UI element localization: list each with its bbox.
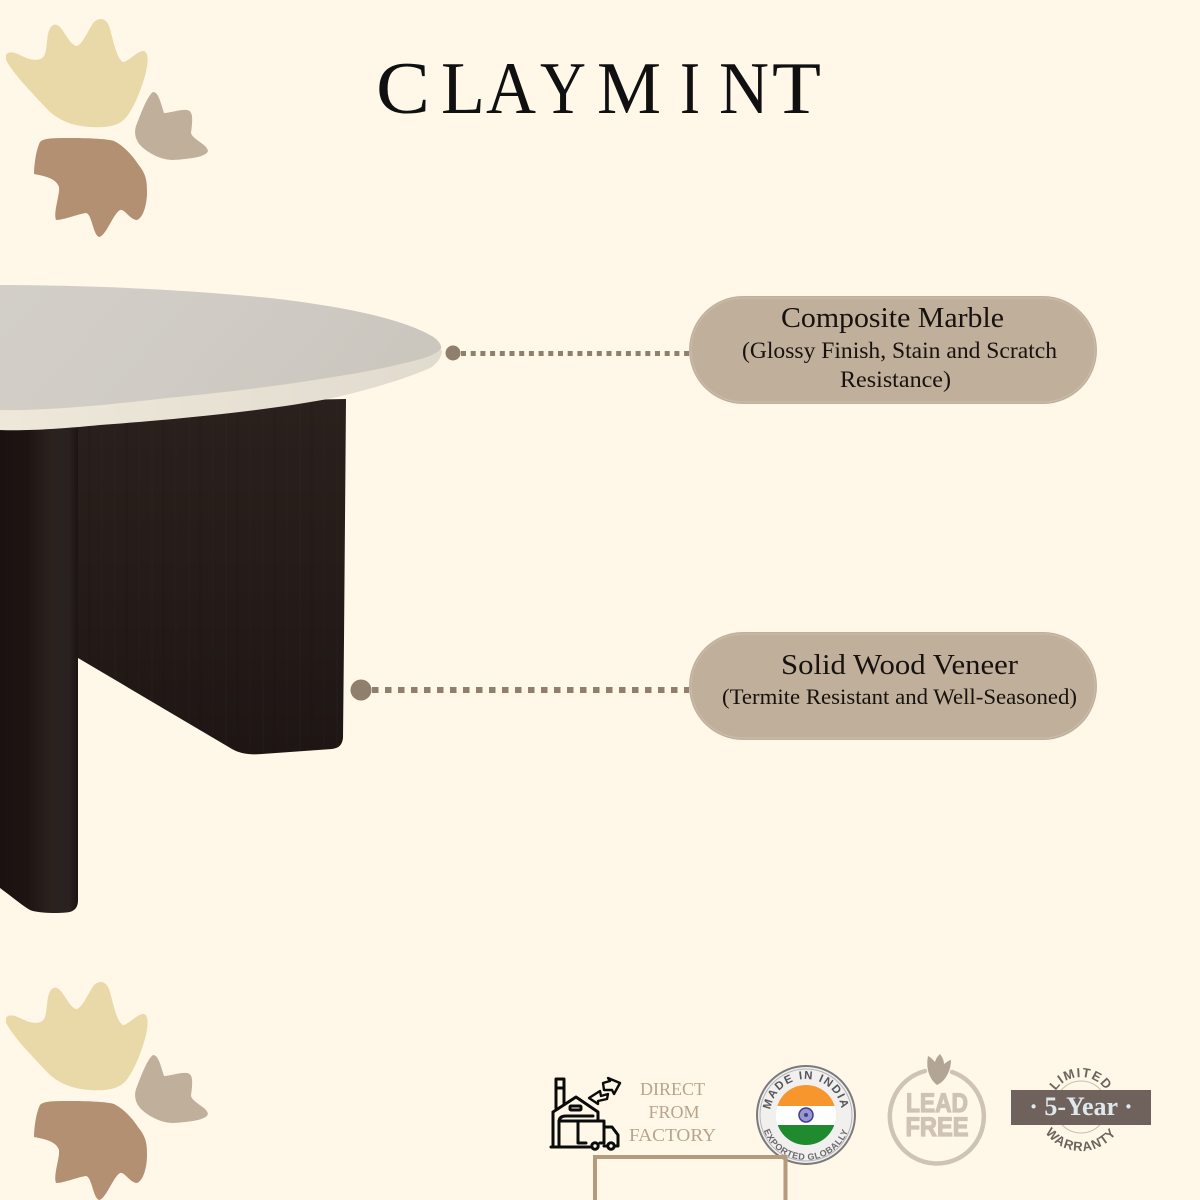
brand logo: CLAYMINT: C — [376, 48, 430, 130]
brand logo: CLAYMINT: Y — [540, 48, 586, 130]
brand logo: CLAYMINT: N — [719, 48, 769, 130]
brand logo: CLAYMINT: M — [597, 48, 661, 130]
decorative leaf cluster: top left — [6, 19, 208, 237]
icon: factory and truck — [551, 1078, 620, 1149]
badge: made in india: MADE IN INDIA — [762, 1070, 848, 1109]
direct from factory label: DIRECT — [640, 1079, 705, 1099]
badge: 5-year limited warranty — [1011, 1068, 1151, 1152]
brand logo: CLAYMINT: I — [680, 48, 700, 130]
direct from factory label — [629, 1079, 716, 1145]
panel wood grain — [79, 399, 345, 754]
badge: 5-year limited warranty: · 5-Year · — [1029, 1092, 1133, 1121]
badge: made in india — [756, 1065, 856, 1165]
callout connector: wood — [350, 680, 689, 700]
badge: 5-year limited warranty: WARRANTY — [1046, 1126, 1114, 1152]
badge: 5-year limited warranty: LIMITED — [1049, 1068, 1110, 1090]
badge: lead free: FREE — [906, 1112, 968, 1142]
callout pill: solid wood veneer: (Termite Resistant and Well-Seasoned) — [722, 684, 1077, 709]
callout pill: composite marble: Resistance) — [840, 367, 951, 392]
badge: lead free: LEAD — [906, 1088, 968, 1118]
callout pill: solid wood veneer — [689, 632, 1097, 740]
marble top — [0, 285, 441, 410]
brand logo: CLAYMINT: L — [441, 48, 485, 130]
callout pill: solid wood veneer: Solid Wood Veneer — [781, 650, 1019, 681]
callout pill: composite marble — [689, 296, 1097, 404]
table panel leg — [60, 399, 346, 754]
table front leg — [0, 425, 78, 913]
decorative leaf cluster: bottom left — [6, 982, 208, 1200]
callout pill: composite marble: Composite Marble — [781, 303, 1004, 334]
direct from factory label: FROM — [648, 1102, 700, 1122]
product photo: round table — [0, 285, 442, 913]
callout connector: marble — [446, 346, 689, 360]
brand logo: CLAYMINT — [376, 48, 821, 130]
direct from factory label: FACTORY — [629, 1125, 716, 1145]
brand logo: CLAYMINT: T — [772, 48, 821, 130]
masked frame box — [595, 1157, 786, 1200]
badge: lead free — [890, 1054, 984, 1163]
badge: made in india: EXPORTED GLOBALLY — [764, 1128, 848, 1160]
marble edge — [0, 350, 442, 430]
callout pill: composite marble: (Glossy Finish, Stain and Scratch — [742, 338, 1058, 363]
brand logo: CLAYMINT: A — [486, 48, 536, 130]
